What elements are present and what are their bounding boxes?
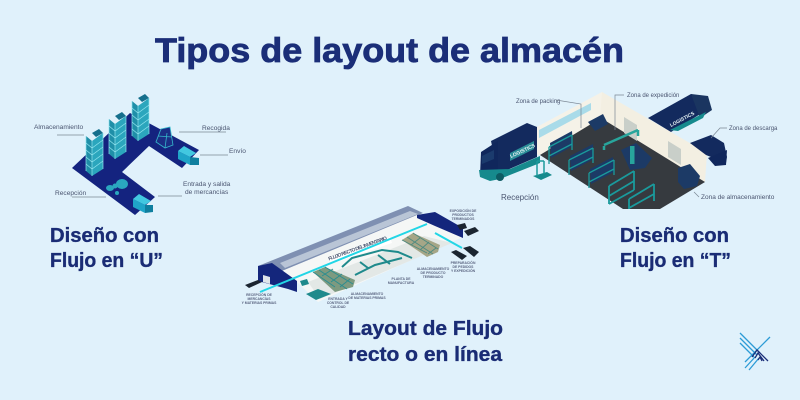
straight-flow labels: EXPOSICIÓN DE bbox=[450, 208, 477, 213]
storage rack 2 bbox=[109, 112, 126, 159]
storage rack 1 bbox=[86, 129, 103, 176]
flow arrow bbox=[260, 224, 427, 292]
straight-flow labels: Y MATERIAS PRIMAS bbox=[242, 301, 277, 305]
panel: U-flow diagram bbox=[34, 94, 246, 215]
straight-flow labels: TERMINADO bbox=[423, 275, 444, 279]
loaded shelf row 1 bbox=[549, 131, 573, 164]
warehouse floor bbox=[540, 118, 705, 209]
straight-flow labels bbox=[242, 208, 477, 309]
heading: T flow bbox=[620, 225, 731, 272]
heading: U flow: Flujo en “U” bbox=[50, 250, 163, 272]
straight-flow labels: MERCANCÍAS bbox=[248, 296, 271, 301]
storage boxes bbox=[678, 164, 700, 189]
heading: T flow: Diseño con bbox=[620, 225, 729, 247]
straight-flow labels: Y EXPEDICIÓN bbox=[451, 268, 476, 273]
flow banner bbox=[328, 237, 392, 264]
raw material racks bbox=[313, 267, 355, 292]
title: Tipos de layout de almacén bbox=[155, 32, 624, 70]
shelving rows bbox=[549, 114, 700, 209]
straight-flow labels: ALMACENAMIENTO bbox=[351, 292, 384, 296]
loaded shelf row 3 bbox=[589, 157, 614, 188]
finished product racks bbox=[402, 233, 440, 257]
T-flow labels bbox=[501, 93, 778, 202]
panel: straight-flow warehouse bbox=[242, 206, 479, 309]
manufacturing line bbox=[342, 250, 412, 275]
U-flow labels: de mercancías bbox=[185, 189, 229, 196]
empty shelf row 5 bbox=[629, 184, 654, 209]
dock doors bbox=[624, 117, 681, 165]
intake machines bbox=[300, 279, 331, 300]
straight-flow labels: DE MATERIAS PRIMAS bbox=[348, 296, 386, 300]
truck: shipping bbox=[178, 146, 199, 165]
icon: brand logo bbox=[740, 333, 770, 370]
floor bbox=[282, 215, 463, 302]
straight-flow labels: RECEPCIÓN DE bbox=[246, 292, 273, 297]
heading: U flow: Diseño con bbox=[50, 225, 159, 247]
forklift bbox=[533, 161, 552, 180]
truck: unloading bbox=[690, 135, 727, 166]
truck: reception bbox=[479, 123, 540, 181]
goods pile: reception bbox=[106, 179, 128, 195]
heading: straight flow bbox=[348, 318, 503, 366]
U floor plan bbox=[72, 113, 199, 215]
left dock door bbox=[263, 275, 270, 284]
side flow arrow bbox=[435, 233, 462, 248]
straight-flow labels: DE PEDIDOS bbox=[453, 265, 474, 269]
U-flow labels: Recogida bbox=[202, 125, 230, 132]
straight-flow labels: PLANTA DE bbox=[391, 277, 411, 281]
heading: U flow bbox=[50, 225, 163, 272]
right end wall bbox=[417, 212, 463, 238]
trucks bbox=[245, 223, 479, 288]
T-flow labels: Zona de almacenamiento bbox=[701, 194, 775, 201]
T-flow labels: Zona de packing bbox=[516, 99, 560, 105]
conveyor bbox=[604, 130, 638, 150]
centre forklift bbox=[621, 143, 652, 170]
heading: straight flow: Layout de Flujo bbox=[348, 318, 503, 340]
picking station bbox=[155, 127, 173, 148]
truck: dispatch bbox=[648, 94, 712, 132]
T-flow labels: Zona de descarga bbox=[729, 126, 778, 132]
truck: inbound bbox=[133, 194, 153, 213]
straight-flow labels: CALIDAD bbox=[330, 305, 346, 309]
U-flow labels: Entrada y salida bbox=[183, 181, 231, 188]
back wall bbox=[258, 206, 423, 271]
T-flow labels: Recepción bbox=[501, 193, 539, 202]
straight-flow labels: TERMINADOS bbox=[452, 217, 475, 221]
straight-flow labels: PRODUCTOS bbox=[452, 213, 475, 217]
straight-flow labels: PREPARACIÓN bbox=[451, 260, 476, 265]
storage rack 3 bbox=[132, 94, 149, 141]
heading: straight flow: recto o en línea bbox=[348, 344, 503, 366]
U-flow labels: Almacenamiento bbox=[34, 124, 83, 131]
straight-flow labels: ALMACENAMIENTO bbox=[417, 267, 450, 271]
loaded shelf row 2 bbox=[569, 144, 594, 175]
warehouse right wall bbox=[600, 92, 707, 182]
window strip bbox=[539, 103, 591, 138]
truck: reception: LOGISTICS bbox=[509, 143, 537, 160]
packing boxes bbox=[588, 114, 608, 131]
truck: dispatch: LOGISTICS bbox=[669, 111, 696, 129]
warehouse left wall bbox=[535, 92, 603, 155]
U-flow labels bbox=[34, 124, 246, 197]
left end wall bbox=[258, 263, 297, 292]
U-flow labels: Envío bbox=[229, 148, 246, 155]
T-flow labels: Zona de expedición bbox=[627, 93, 679, 99]
straight-flow labels: CONTROL DE bbox=[327, 301, 350, 305]
panel: T-flow warehouse bbox=[479, 92, 778, 209]
heading: T flow: Flujo en “T” bbox=[620, 250, 731, 272]
straight-flow labels: ENTRADA Y bbox=[328, 297, 349, 301]
straight-flow labels: MANUFACTURA bbox=[388, 281, 415, 285]
panel: straight-flow warehouse: FLUJO RECTO DEL INVENTARIO bbox=[328, 235, 388, 262]
empty shelf row 4 bbox=[609, 171, 634, 204]
straight-flow labels: DE PRODUCTO bbox=[420, 271, 446, 275]
U-flow labels: Recepción bbox=[55, 190, 86, 197]
